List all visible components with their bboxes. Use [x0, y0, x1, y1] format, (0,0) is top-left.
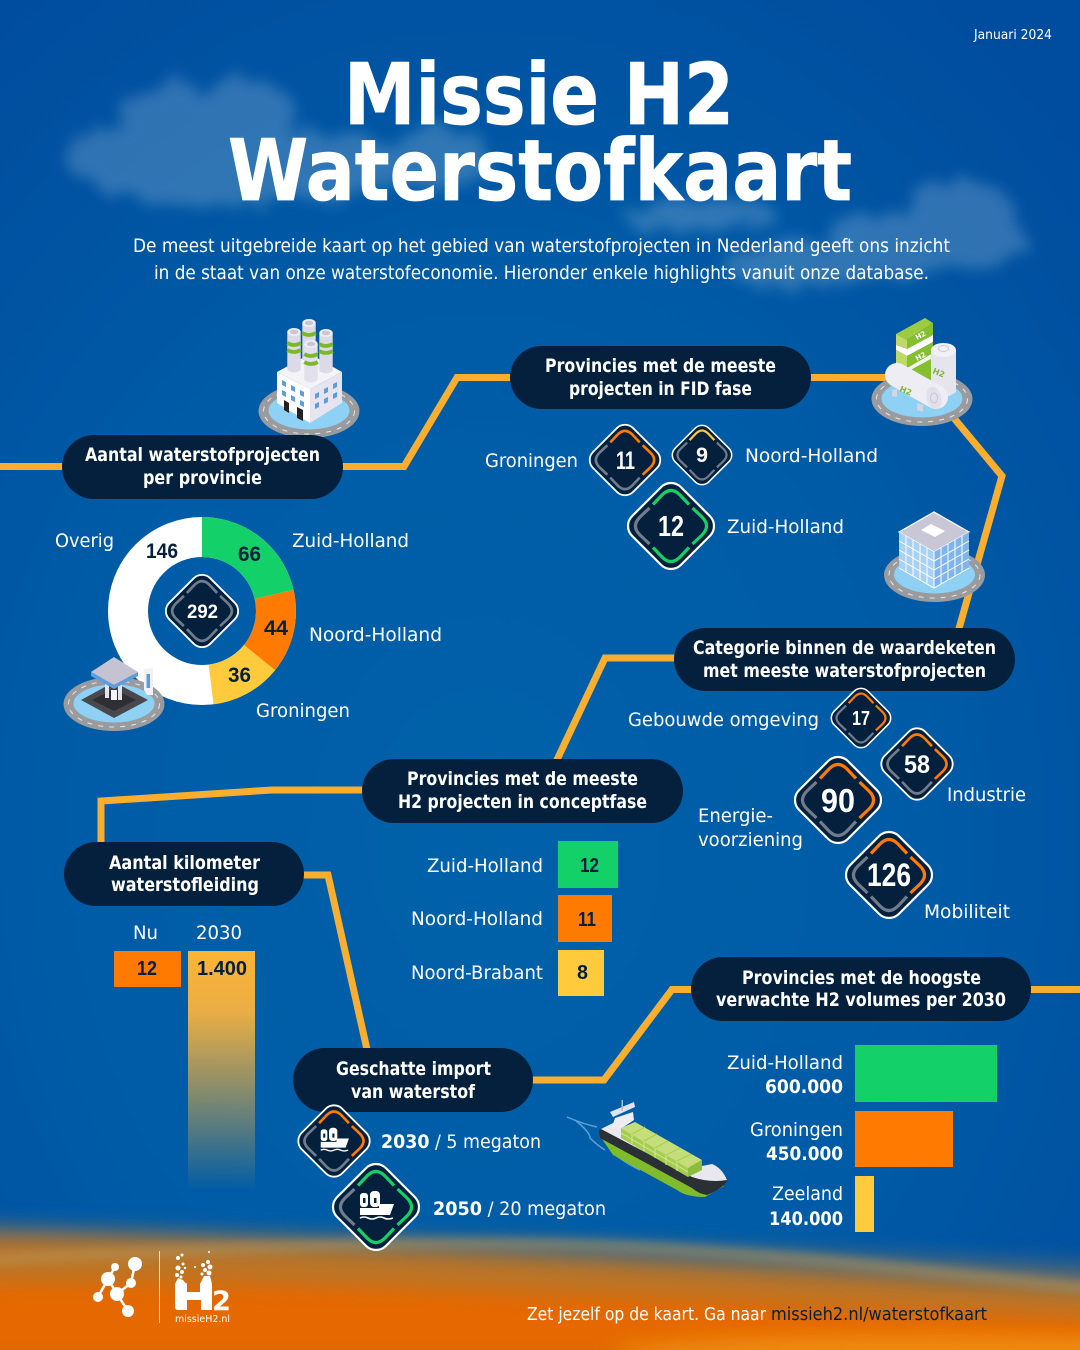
pill: verwachte volumes — [691, 957, 1031, 1021]
bar chart: conceptfase: Noord-Brabant — [411, 962, 543, 984]
footer call to action: Zet jezelf op de kaart. Ga naar — [527, 1304, 767, 1325]
icon: hydrogen tanks on island: H2 — [898, 385, 913, 397]
donut chart: projecten per provincie: 66 — [238, 543, 261, 566]
icon: hydrogen tanks on island: H2 — [914, 351, 928, 363]
bar chart: volumes 2030: 450.000 — [766, 1143, 843, 1165]
category labels: Industrie — [947, 784, 1026, 806]
badge: import 2050 — [327, 1158, 606, 1256]
badge: 90: 90 — [821, 782, 855, 819]
pill: geschatte import: Geschatte import — [336, 1058, 491, 1080]
pill: categorie waardeketen: met meeste waterstofprojecten — [703, 660, 986, 682]
title — [228, 46, 852, 221]
fid labels: Zuid-Holland — [727, 516, 844, 538]
pill: provincies FID fase — [510, 346, 811, 409]
logo: molecule — [93, 1257, 142, 1317]
donut chart: projecten per provincie: 146 — [146, 540, 178, 563]
badge: Zuid-Holland 12: 12 — [658, 511, 684, 543]
badge: 126 — [840, 826, 938, 924]
icon: office building on island — [884, 512, 985, 602]
pill: categorie waardeketen: Categorie binnen de waardeketen — [693, 637, 996, 659]
fid labels: Groningen — [485, 450, 578, 472]
pill: verwachte volumes: Provincies met de hoogste — [742, 967, 981, 989]
donut chart: projecten per provincie: 44 — [264, 617, 288, 640]
donut chart: projecten per provincie — [55, 517, 442, 722]
badge: 126: 126 — [867, 857, 911, 893]
bar chart: volumes 2030 — [727, 1045, 997, 1232]
bar chart: conceptfase: 11 — [578, 909, 596, 931]
donut chart: projecten per provincie: Groningen — [256, 700, 350, 722]
icon: hydrogen tanks on island: H2 — [914, 330, 928, 342]
intro text — [133, 235, 950, 284]
donut chart: projecten per provincie: 36 — [228, 664, 251, 687]
pill: geschatte import — [293, 1048, 533, 1112]
bar chart: volumes 2030: Groningen — [750, 1119, 843, 1141]
badge: 90 — [789, 751, 887, 849]
pill: categorie waardeketen — [674, 628, 1015, 691]
date: Januari 2024 — [973, 28, 1052, 43]
logo divider — [159, 1251, 160, 1323]
footer call to action — [527, 1304, 987, 1325]
category labels: voorziening — [698, 829, 803, 851]
pill: conceptfase: Provincies met de meeste — [407, 768, 638, 790]
bar chart: volumes 2030: Zeeland — [772, 1183, 843, 1205]
pill: verwachte volumes: verwachte H2 volumes per 2030 — [716, 989, 1006, 1011]
bar chart: conceptfase: Noord-Holland — [411, 908, 543, 930]
badge: import 2030: 2030 / 5 megaton — [381, 1131, 541, 1153]
icon: container ship — [567, 1100, 727, 1197]
pill: aantal waterstofprojecten — [62, 435, 343, 499]
icon: hydrogen tanks on island: H2 — [931, 367, 946, 379]
bar chart: conceptfase: Zuid-Holland — [427, 855, 543, 877]
category labels: Energie- — [698, 805, 773, 827]
badge: Zuid-Holland 12 — [622, 477, 720, 575]
fid labels — [485, 445, 878, 538]
bar chart: volumes 2030: 600.000 — [765, 1076, 843, 1098]
category labels — [628, 709, 1026, 923]
pill: aantal waterstofprojecten: Aantal waterstofprojecten — [85, 444, 320, 466]
bar chart: conceptfase — [411, 841, 618, 996]
fid labels: Noord-Holland — [745, 445, 878, 467]
badge: Groningen 11: 11 — [616, 447, 635, 475]
intro text: De meest uitgebreide kaart op het gebied van waterstofprojecten in Nederland geeft ons inzicht — [133, 235, 950, 257]
badge: totaal 292 — [161, 570, 243, 652]
logo: missieH2: 2 — [212, 1286, 231, 1317]
pill: conceptfase — [362, 759, 683, 823]
pill: conceptfase: H2 projecten in conceptfase — [398, 791, 647, 813]
pill: kilometer waterstofleiding: Aantal kilometer — [109, 852, 261, 874]
bar chart: kilometer: 1.400 — [197, 958, 247, 980]
category badges — [628, 684, 1026, 924]
badge: totaal 292: 292 — [187, 602, 218, 623]
badge: Groningen 11 — [585, 420, 665, 500]
icon: factory on island — [258, 319, 360, 438]
logo: missieH2: missieH2.nl — [175, 1314, 230, 1325]
logo: missieH2 — [175, 1251, 231, 1325]
fid badges — [485, 420, 878, 575]
pill: geschatte import: van waterstof — [351, 1081, 476, 1103]
sunset band — [0, 1222, 1080, 1350]
badge: 58 — [877, 724, 957, 804]
donut chart: projecten per provincie: Overig — [55, 530, 114, 552]
pill: kilometer waterstofleiding: waterstofleiding — [111, 874, 259, 896]
badge: Noord-Holland 9 — [668, 421, 736, 489]
icon: hydrogen station on island — [64, 657, 164, 731]
bar chart: kilometer: Nu — [133, 922, 158, 944]
clouds — [70, 77, 1030, 287]
category labels: Gebouwde omgeving — [628, 709, 819, 731]
bar chart: kilometer: 2030 — [196, 922, 242, 944]
badge: import 2050: 2050 / 20 megaton — [433, 1198, 606, 1220]
footer call to action: missieh2.nl/waterstofkaart — [771, 1304, 987, 1325]
intro text: in de staat van onze waterstofeconomie. Hieronder enkele highlights vanuit onze database. — [154, 262, 929, 284]
bar chart: kilometer: 12 — [137, 958, 157, 980]
title: Waterstofkaart — [228, 122, 852, 221]
badge: import 2030 — [294, 1101, 541, 1181]
donut chart: projecten per provincie: Zuid-Holland — [292, 530, 409, 552]
badge: 17: 17 — [852, 708, 870, 730]
icon: hydrogen tanks on island — [872, 318, 972, 426]
donut chart: projecten per provincie: Noord-Holland — [309, 624, 442, 646]
badge: Noord-Holland 9: 9 — [696, 444, 708, 467]
badge: 58: 58 — [904, 751, 930, 779]
connecting route line — [0, 378, 1080, 1080]
bar chart: conceptfase: 8 — [577, 962, 588, 984]
bar chart: volumes 2030: 140.000 — [769, 1208, 843, 1230]
badge: 17 — [827, 684, 895, 752]
pill: kilometer waterstofleiding — [64, 842, 304, 906]
category labels: Mobiliteit — [924, 901, 1010, 923]
pill: provincies FID fase: Provincies met de meeste — [545, 355, 776, 377]
pill: aantal waterstofprojecten: per provincie — [143, 467, 262, 489]
bar chart: kilometer — [114, 922, 255, 1191]
bar chart: volumes 2030: Zuid-Holland — [727, 1052, 843, 1074]
bar chart: conceptfase: 12 — [580, 855, 599, 877]
title: Missie H2 — [344, 46, 734, 145]
pill: provincies FID fase: projecten in FID fase — [569, 378, 752, 400]
